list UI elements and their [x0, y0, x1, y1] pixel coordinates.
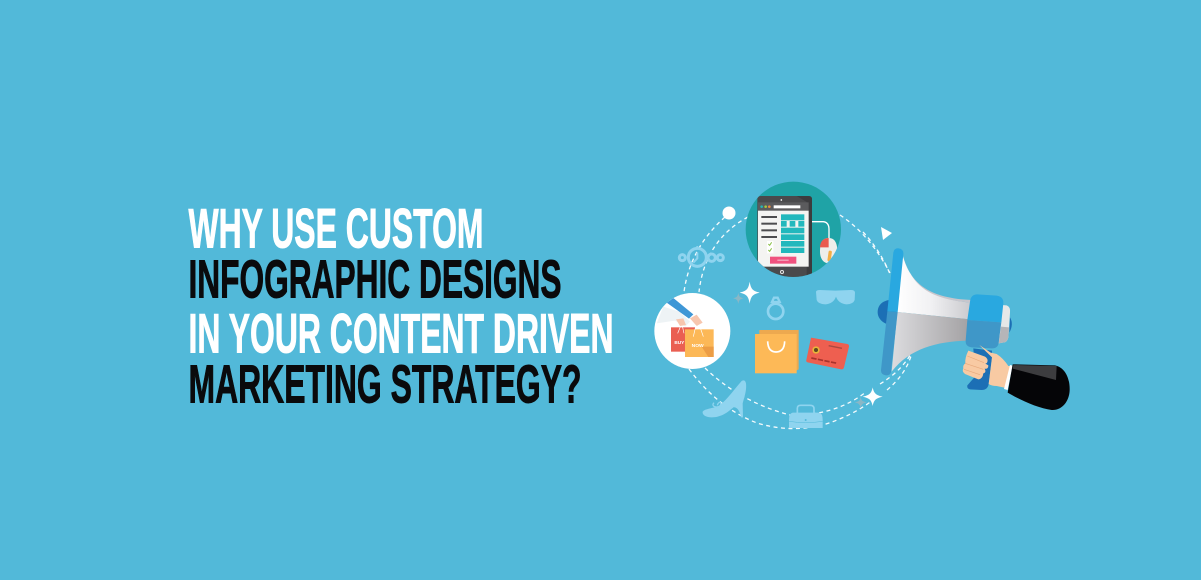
- arrow head: [881, 227, 892, 240]
- title line 1: WHY USE CUSTOM: [188, 196, 484, 260]
- suit sleeve: [1008, 364, 1070, 410]
- dashed orbit lines: [684, 215, 913, 429]
- mouse: [820, 238, 837, 263]
- icon: sparkles lower: [855, 387, 883, 409]
- yellow bag labelled NOW: [685, 329, 714, 357]
- rear section: [999, 305, 1010, 343]
- horn upper: [897, 255, 972, 319]
- horn lower: [892, 312, 970, 372]
- icon: hand with shopping bags in white circle: BUY: [674, 340, 684, 345]
- hands: [676, 318, 686, 326]
- icon: ring: [768, 298, 783, 319]
- icon: hand with shopping bags in white circle: [654, 293, 730, 369]
- icon: sunglasses: [816, 290, 855, 304]
- megaphone back cap: [878, 300, 897, 325]
- icon: watch: [679, 246, 723, 266]
- icon: orange shopping bag: [755, 330, 799, 373]
- browser bar: [758, 202, 809, 211]
- title line 2: INFOGRAPHIC DESIGNS: [188, 250, 562, 310]
- tablet body: [757, 196, 812, 280]
- hand: [979, 345, 1012, 388]
- icon: credit card: [806, 338, 849, 369]
- icon: tablet and mouse in teal circle: [746, 182, 841, 280]
- mouse cable: [812, 222, 829, 238]
- icon: hand with shopping bags in white circle: NOW: [692, 343, 704, 348]
- title line 3: IN YOUR CONTENT DRIVEN: [188, 302, 614, 364]
- grip: [967, 348, 992, 390]
- shirt cuff: [1004, 365, 1013, 390]
- red bag labelled BUY: [671, 327, 695, 352]
- icon: high heel shoe: [703, 380, 746, 417]
- icon: megaphone held by hand: [878, 248, 1070, 410]
- small white dot: [722, 206, 736, 220]
- icon: sparkles upper: [733, 282, 760, 304]
- sleeve: [657, 307, 690, 327]
- title line 4: MARKETING STRATEGY?: [188, 354, 582, 414]
- rim: [887, 248, 903, 312]
- icon: handbag: [789, 405, 823, 428]
- title: [188, 196, 614, 414]
- screen: [758, 211, 809, 267]
- handle collar: [967, 294, 1003, 322]
